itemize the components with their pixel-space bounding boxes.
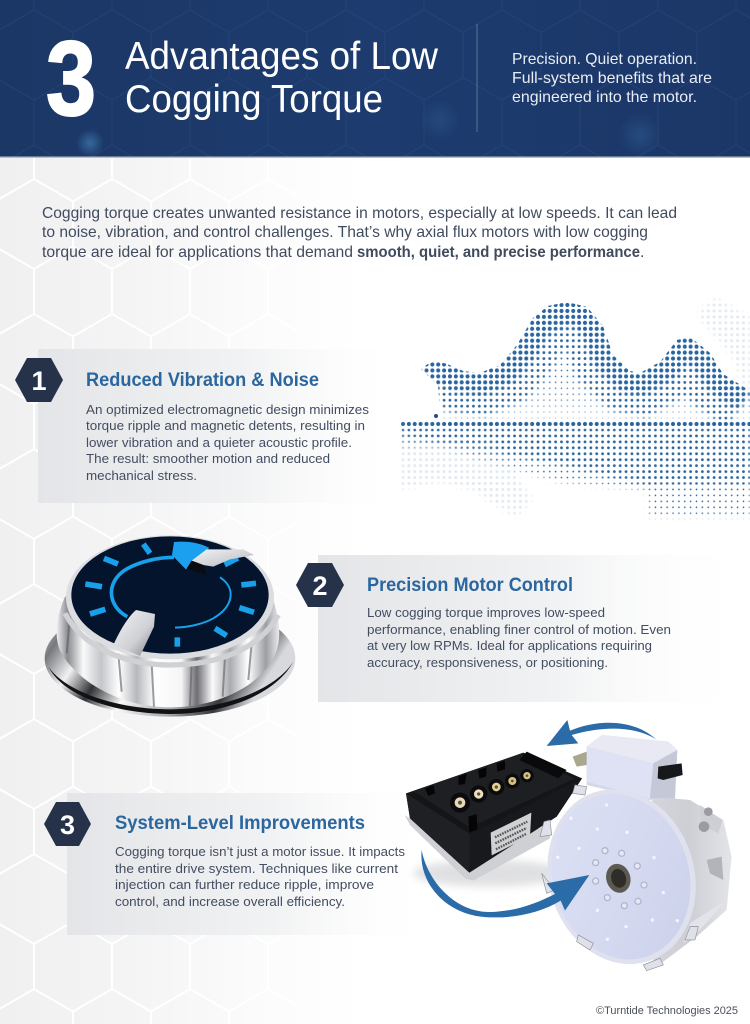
header divider (476, 24, 478, 132)
top rim (66, 535, 274, 659)
center line (401, 421, 750, 427)
copyright footer: ©Turntide Technologies 2025 (596, 1005, 738, 1017)
heading 3: System-Level Improvements (115, 812, 365, 834)
lower reflection (402, 428, 750, 490)
body 1: torque ripple and magnetic detents, resulting in (86, 418, 365, 433)
body 3: injection can further reduce ripple, improve (115, 877, 374, 892)
body 3 (115, 844, 405, 909)
body 2: at very low RPMs. Ideal for applications requiring (367, 638, 652, 653)
dial highlight wedge (172, 542, 209, 569)
body 1: lower vibration and a quieter acoustic profile. (86, 435, 352, 450)
panel: precision motor control (296, 555, 750, 702)
heading 1: Reduced Vibration & Noise (86, 369, 319, 391)
motor terminal box (573, 735, 683, 800)
connector (519, 752, 567, 778)
body 3: Cogging torque isn’t just a motor issue. It impacts (115, 844, 405, 859)
sound wave dot graphic (400, 290, 750, 525)
controller and motor illustration (405, 720, 732, 983)
label (491, 813, 531, 855)
title: Advantages of Low (125, 35, 439, 78)
motor face plate (526, 771, 717, 983)
faint trailing dots (402, 440, 533, 514)
panel: system-level improvements (44, 793, 437, 935)
panel: reduced vibration and noise (15, 349, 408, 503)
terminals (450, 769, 534, 813)
header subtitle: Precision. Quiet operation. (512, 51, 697, 68)
header banner (0, 0, 750, 158)
intro paragraph: torque are ideal for applications that demand (42, 244, 353, 261)
big numeral 3: 3 (46, 20, 96, 138)
badge 3 (44, 802, 91, 846)
intro paragraph: smooth, quiet, and precise performance (357, 244, 640, 261)
mounting holes (556, 803, 679, 941)
motor body (623, 797, 732, 967)
badge 3: 3 (60, 810, 75, 840)
badge 2 (296, 563, 344, 607)
control knob illustration (45, 535, 295, 717)
pointer upper (192, 549, 254, 567)
body 3: control, and increase overall efficiency. (115, 894, 345, 909)
body 2: Low cogging torque improves low-speed (367, 605, 605, 620)
badge 1 (15, 358, 63, 402)
badge 2: 2 (312, 571, 328, 601)
body 1: The result: smoother motion and reduced (86, 451, 330, 466)
header subtitle: Full-system benefits that are (512, 70, 712, 87)
badge 1: 1 (31, 366, 47, 396)
fluted body (57, 590, 279, 707)
page background hex pattern (0, 157, 360, 1024)
hub bolts (593, 848, 647, 909)
intro paragraph (42, 205, 677, 261)
shadow (413, 860, 567, 887)
body 1: mechanical stress. (86, 468, 197, 483)
intro paragraph: Cogging torque creates unwanted resistance in motors, especially at low speeds. It can lead (42, 205, 677, 222)
body 2: performance, enabling finer control of motion. Even (367, 622, 671, 637)
pointer lower (113, 610, 155, 656)
base ring (45, 600, 295, 717)
arrow: motor to controller (547, 720, 656, 746)
body 3: the entire drive system. Techniques like current (115, 861, 398, 876)
body 1 (86, 402, 369, 483)
intro paragraph: . (640, 244, 644, 261)
controller (405, 752, 582, 881)
upper wave (421, 302, 750, 420)
heading 2: Precision Motor Control (367, 574, 573, 596)
body 1: An optimized electromagnetic design minimizes (86, 402, 369, 417)
motor shaft (603, 861, 634, 896)
arrow: controller to motor (421, 850, 589, 917)
body 2: accuracy, responsiveness, or positioning. (367, 655, 608, 670)
header subtitle: engineered into the motor. (512, 89, 697, 106)
intro paragraph: to noise, vibration, and control challenges. That’s why axial flux motors with low cogging (42, 224, 648, 241)
title: Cogging Torque (125, 78, 383, 121)
body 2 (367, 605, 671, 670)
dial ticks (85, 544, 256, 647)
dark dial face (71, 536, 269, 654)
title (125, 35, 439, 121)
dial arcs (111, 557, 174, 617)
header subtitle (512, 51, 712, 106)
